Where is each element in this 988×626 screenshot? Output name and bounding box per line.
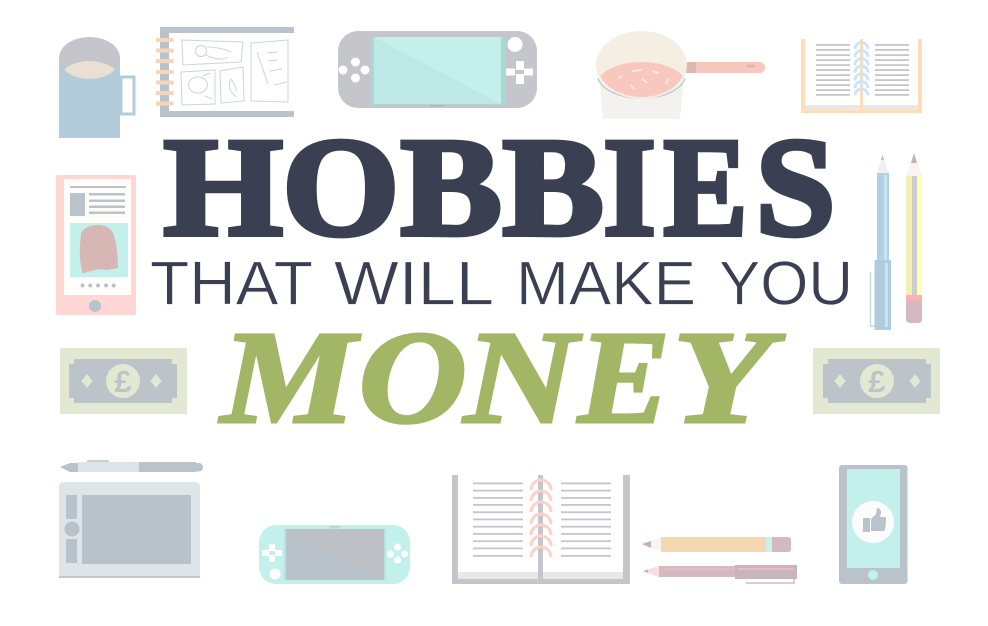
- icon: drawing tablet: [59, 482, 200, 578]
- icon: blue pen: [870, 155, 891, 330]
- title: HOBBIES: I: [603, 110, 656, 266]
- icon: banknote right: £: [868, 364, 886, 399]
- icon: sketchbook: [156, 27, 294, 117]
- title: MONEY: N: [462, 303, 583, 451]
- subtitle: THAT WILL MAKE YOU: THAT: [150, 250, 313, 318]
- icon: stylus: [60, 460, 203, 472]
- title: MONEY: E: [577, 303, 670, 451]
- title: HOBBIES: [164, 110, 836, 266]
- title: MONEY: Y: [672, 303, 785, 451]
- title: HOBBIES: B: [502, 110, 604, 266]
- icon: yellow pencil: [906, 153, 922, 323]
- title: HOBBIES: E: [664, 110, 748, 266]
- title: MONEY: O: [358, 303, 467, 451]
- icon: saucepan: [596, 31, 765, 119]
- icon: orange pencil: [642, 537, 791, 552]
- icon: open book bottom: [452, 475, 630, 584]
- title: MONEY: M: [219, 303, 360, 451]
- title: HOBBIES: B: [400, 110, 502, 266]
- icon: coffee mug: [58, 37, 134, 138]
- title: MONEY: [219, 303, 785, 451]
- subtitle: THAT WILL MAKE YOU: [150, 250, 853, 318]
- subtitle: THAT WILL MAKE YOU: YOU: [719, 250, 853, 318]
- icon: banknote left: £: [114, 364, 132, 399]
- icon: pink phone: [56, 175, 136, 315]
- icon: game console bottom: [259, 525, 410, 584]
- title: HOBBIES: S: [756, 110, 836, 266]
- subtitle: THAT WILL MAKE YOU: MAKE: [516, 250, 696, 318]
- title: HOBBIES: H: [164, 110, 283, 266]
- icon: phone with thumbs up: [839, 465, 908, 584]
- infographic canvas: [56, 27, 940, 584]
- icon: game console top: [338, 31, 537, 108]
- icon: open book top: [801, 39, 922, 113]
- subtitle: THAT WILL MAKE YOU: WILL: [334, 250, 494, 318]
- title: HOBBIES: O: [282, 110, 400, 266]
- icon: mauve pen: [643, 565, 797, 583]
- icon: banknote right: [813, 348, 940, 414]
- icon: banknote left: [60, 348, 187, 414]
